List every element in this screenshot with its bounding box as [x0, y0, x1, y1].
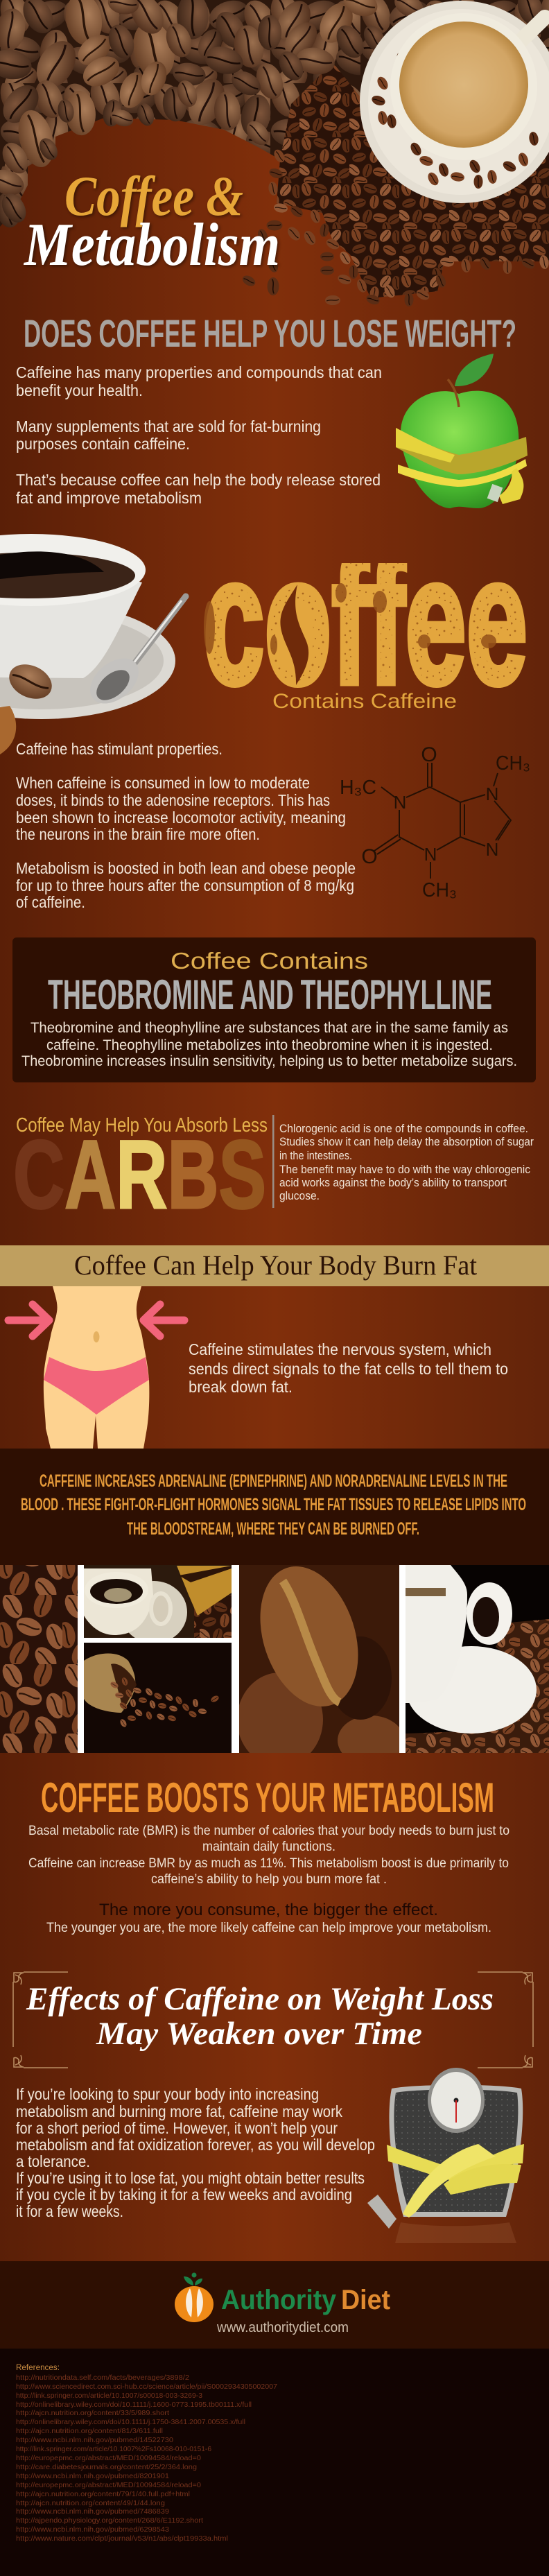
- references list: http://www.ncbi.nlm.nih.gov/pubmed/7486839: [16, 2507, 169, 2516]
- carbs heading: Coffee May Help You Absorb Less: [16, 1114, 268, 1136]
- carbs body text: [279, 1122, 534, 1202]
- references list: http://ajpendo.physiology.org/content/268/6/E1192.short: [16, 2516, 203, 2525]
- fat burning text: sends direct signals to the fat cells to tell them to: [189, 1360, 508, 1378]
- metabolism text: maintain daily functions.: [202, 1840, 336, 1854]
- stimulant text: been shown to increase locomotor activity, meaning: [16, 809, 346, 827]
- metabolism text: caffeine’s ability to help you burn more fat .: [151, 1872, 387, 1887]
- references heading: References:: [16, 2364, 60, 2372]
- panel: theobromine and theophylline: [12, 937, 536, 1082]
- icon: apple with measuring tape: [396, 354, 528, 508]
- references list: http://ajcn.nutrition.org/content/33/5/989.short: [16, 2409, 169, 2417]
- tolerance text: a tolerance.: [16, 2152, 90, 2170]
- references list: http://ajcn.nutrition.org/content/49/1/44.long: [16, 2499, 165, 2507]
- stimulant text: Metabolism is boosted in both lean and obese people: [16, 859, 356, 877]
- icon: spoon: [82, 596, 186, 713]
- references list: http://europepmc.org/abstract/MED/10094584/reload=0: [16, 2454, 201, 2462]
- logo wordmark: Authority: [221, 2285, 337, 2315]
- intro text: That’s because coffee can help the body release stored: [16, 471, 381, 489]
- references list: [16, 2374, 277, 2543]
- callout: the more you consume: The more you consume, the bigger the effect.: [99, 1901, 438, 1919]
- logo url: www.authoritydiet.com: [216, 2320, 349, 2335]
- banner: coffee can help burn fat: Coffee Can Help Your Body Burn Fat: [74, 1250, 477, 1281]
- tolerance text: it for a few weeks.: [16, 2202, 123, 2220]
- caffeine molecule diagram: H₃C: [340, 777, 376, 799]
- references list: http://nutritiondata.self.com/facts/beverages/3898/2: [16, 2374, 189, 2382]
- saucer: [360, 1, 549, 203]
- intro text: [16, 363, 382, 507]
- caffeine molecule diagram: [340, 743, 530, 901]
- stimulant text: [16, 740, 356, 911]
- intro text: purposes contain caffeine.: [16, 435, 190, 453]
- ornate frame with heading: Effects of Caffeine on Weight Loss: [26, 1981, 494, 2017]
- carbs body text: Chlorogenic acid is one of the compounds in coffee.: [279, 1122, 528, 1135]
- panel body text: [21, 1020, 517, 1069]
- edge beans softening the small bean field: [268, 148, 549, 306]
- title: Coffee &: [64, 164, 243, 227]
- icon: coffee bean on saucer: [3, 658, 58, 705]
- section: carbs: [13, 1114, 534, 1229]
- carbs body text: The benefit may have to do with the way chlorogenic: [279, 1163, 530, 1176]
- photo: white cup and beans: [406, 1565, 549, 1753]
- caffeine molecule diagram: O: [421, 743, 437, 766]
- hero: coffee beans and cup: [0, 0, 549, 306]
- caffeine molecule diagram: N: [486, 839, 498, 860]
- references list: http://www.ncbi.nlm.nih.gov/pubmed/8201901: [16, 2472, 169, 2480]
- photo: macro bean: [239, 1565, 399, 1753]
- fat burning text: break down fat.: [189, 1378, 293, 1396]
- carbs body text: acid works against the body’s ability to transport: [279, 1176, 507, 1189]
- references list: http://ajcn.nutrition.org/content/81/3/611.full: [16, 2427, 163, 2435]
- panel body text: caffeine. Theophylline metabolizes into theobromine when it is ingested.: [46, 1037, 493, 1053]
- references list: http://onlinelibrary.wiley.com/doi/10.1111/j.1750-3841.2007.00535.x/full: [16, 2418, 245, 2426]
- tolerance text: metabolism and burning more fat, caffeine may work: [16, 2102, 342, 2120]
- references list: http://www.ncbi.nlm.nih.gov/pubmed/6298543: [16, 2525, 169, 2534]
- intro text: Caffeine has many properties and compounds that can: [16, 363, 382, 381]
- band: adrenaline text: [0, 1449, 549, 1565]
- photo collage: [0, 1565, 549, 1753]
- tolerance text: for a short period of time. However, it won’t help your: [16, 2119, 338, 2137]
- references list: http://link.springer.com/article/10.1007%2Fs10068-010-0151-6: [16, 2445, 211, 2453]
- carbs body text: in the intestines.: [279, 1149, 352, 1162]
- metabolism text: Caffeine can increase BMR by as much as 11%. This metabolism boost is due primarily to: [28, 1856, 509, 1871]
- banner: coffee can help burn fat: [0, 1245, 549, 1286]
- references section: [0, 2349, 549, 2576]
- tolerance text: if you cycle it by taking it for a few weeks and avoiding: [16, 2186, 352, 2204]
- coffee wordmark: [204, 563, 525, 688]
- stimulant text: When caffeine is consumed in low to moderate: [16, 774, 310, 792]
- ornate frame with heading: May Weaken over Time: [96, 2016, 422, 2052]
- stimulant text: Caffeine has stimulant properties.: [16, 740, 223, 758]
- references list: http://care.diabetesjournals.org/content/25/2/364.long: [16, 2463, 197, 2471]
- caffeine molecule diagram: N: [424, 844, 437, 865]
- footer: logo band: [0, 2261, 549, 2349]
- illustration: black coffee cup on saucer: [0, 534, 186, 754]
- references list: http://ajcn.nutrition.org/content/79/1/40.full.pdf+html: [16, 2490, 190, 2498]
- icon: left arrow: [8, 1304, 49, 1336]
- references list: http://onlinelibrary.wiley.com/doi/10.1111/j.1600-0773.1995.tb00111.x/full: [16, 2401, 252, 2409]
- stimulant text: the neurons in the brain fire more often.: [16, 825, 260, 843]
- tolerance text: If you’re looking to spur your body into increasing: [16, 2085, 319, 2103]
- icon: bathroom scale with tape: [367, 2068, 524, 2243]
- panel body text: Theobromine and theophylline are substances that are in the same family as: [31, 1020, 508, 1036]
- caffeine molecule diagram: CH₃: [422, 879, 457, 901]
- icon: authority diet logo: [175, 2273, 214, 2322]
- caffeine molecule diagram: N: [394, 792, 406, 813]
- logo wordmark: Diet: [341, 2285, 390, 2315]
- stimulant text: doses, it binds to the adenosine receptors. This has: [16, 791, 330, 809]
- caffeine molecule diagram: CH₃: [496, 752, 530, 775]
- cup handle: [516, 17, 545, 45]
- tolerance text: metabolism and fat oxidization forever, as you will develop: [16, 2136, 375, 2154]
- fat burning text: Caffeine stimulates the nervous system, which: [189, 1340, 491, 1358]
- fat burning text: [189, 1340, 508, 1396]
- references list: http://www.ncbi.nlm.nih.gov/pubmed/14522730: [16, 2436, 173, 2444]
- icon: right arrow: [143, 1304, 184, 1336]
- stray beans: [241, 221, 353, 305]
- references list: http://www.nature.com/clpt/journal/v53/n1/abs/clpt19933a.html: [16, 2534, 228, 2543]
- intro text: Many supplements that are sold for fat-burning: [16, 417, 321, 435]
- subheading: contains caffeine: Contains Caffeine: [272, 690, 457, 713]
- caffeine molecule diagram: N: [486, 784, 498, 804]
- references list: http://europepmc.org/abstract/MED/10094584/reload=0: [16, 2481, 201, 2489]
- photo: cup and grinder: [84, 1565, 232, 1643]
- coffee cup: [390, 13, 537, 160]
- metabolism text: Basal metabolic rate (BMR) is the number of calories that your body needs to burn just to: [28, 1824, 509, 1838]
- references list: http://www.sciencedirect.com.sci-hub.cc/science/article/pii/S0002934305002007: [16, 2383, 277, 2391]
- panel body text: Theobromine increases insulin sensitivity, helping us to better metabolize sugars.: [21, 1053, 517, 1069]
- stimulant text: of caffeine.: [16, 893, 85, 911]
- panel heading: coffee contains: Coffee Contains: [171, 948, 368, 974]
- title: [23, 164, 280, 279]
- references list: http://link.springer.com/article/10.1007/s00018-003-3269-3: [16, 2392, 202, 2400]
- photo: burlap sack of beans: [84, 1643, 232, 1753]
- stimulant text: for up to three hours after the consumption of 8 mg/kg: [16, 876, 354, 894]
- tolerance text: If you’re using it to lose fat, you might obtain better results: [16, 2169, 365, 2187]
- illustration: waist with arrows: [8, 1286, 184, 1449]
- caffeine molecule diagram: O: [361, 845, 378, 868]
- title: Metabolism: [23, 211, 280, 279]
- ornate frame with heading: [13, 1972, 533, 2068]
- intro text: benefit your health.: [16, 381, 143, 399]
- intro text: fat and improve metabolism: [16, 489, 202, 507]
- tolerance text: [16, 2085, 375, 2220]
- metabolism text: The younger you are, the more likely caffeine can help improve your metabolism.: [46, 1921, 491, 1935]
- carbs pastry letters: CARBS: [13, 1120, 266, 1229]
- metabolism text: [28, 1824, 509, 1935]
- photo: beans: [0, 1565, 78, 1753]
- carbs body text: glucose.: [279, 1189, 320, 1202]
